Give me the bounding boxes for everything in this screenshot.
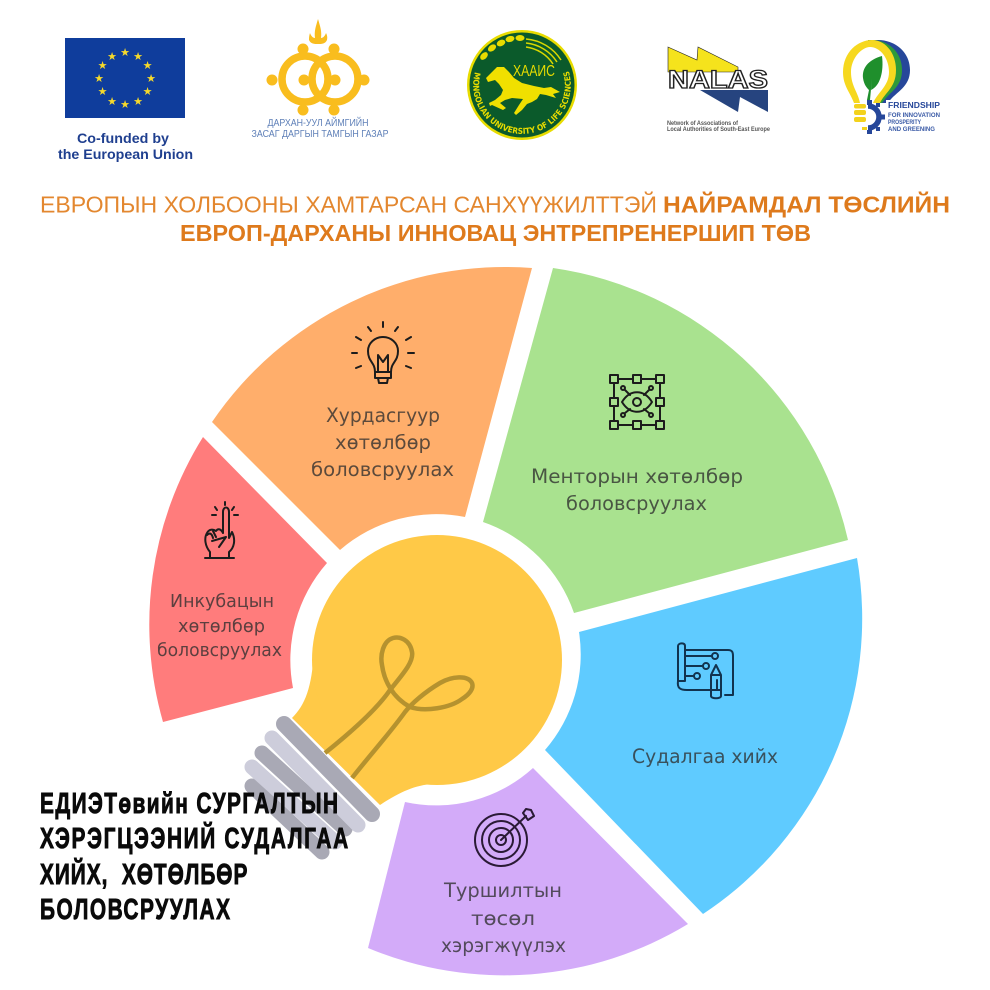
logo: NALAS: Network of Associations of [667,121,739,127]
logo: NALAS [667,47,771,133]
illustration: central light bulb [252,535,562,852]
logo: EU co-funded: ★ [133,51,143,63]
logo: Darkhan-Uul aimag [252,19,389,140]
heading: bold caption: ЕДИЭТөвийн СУРГАЛТЫН [40,788,338,820]
logo: Mongolian University of Life Sciences [467,30,577,140]
logo: EU co-funded: ★ [143,60,153,72]
text: pilot label: төсөл [471,907,535,930]
text: incubation label: боловсруулах [157,641,282,661]
title: ЕВРОПЫН ХОЛБООНЫ ХАМТАРСАН САНХҮҮЖИЛТТЭЙ [40,190,657,218]
logo: NALAS: Local Authorities of South-East Europe [667,127,771,133]
panel: incubation programme [149,437,327,722]
logo: Mongolian University of Life Sciences: MONGOLIAN UNIVERSITY OF LIFE SCIENCES [473,72,571,134]
title [40,190,950,246]
logo: EU co-funded: ★ [146,73,156,85]
text: accelerator label: боловсруулах [311,458,454,481]
title: НАЙРАМДАЛ ТӨСЛИЙН [663,190,950,218]
logo: Friendship: FRIENDSHIP [888,101,941,110]
panel: research [545,558,862,914]
heading: bold caption [40,788,348,926]
text: incubation label [157,592,282,661]
logo: NALAS: NALAS [668,66,768,94]
heading: bold caption: ХИЙХ, ХӨТӨЛБӨР [40,856,247,891]
text: mentor label [531,465,743,515]
text: accelerator label [311,404,454,481]
text: accelerator label: Хурдасгуур [326,404,440,427]
heading: bold caption: БОЛОВСРУУЛАХ [40,894,230,926]
text: incubation label: хөтөлбөр [178,617,265,637]
text: incubation label: Инкубацын [170,592,274,612]
logo: Darkhan-Uul aimag: ДАРХАН-УУЛ АЙМГИЙН [268,116,368,129]
icon: target [475,809,534,866]
logo: EU co-funded: ★ [133,96,143,108]
text: mentor label: боловсруулах [566,492,707,515]
logo: EU co-funded: ★ [94,73,104,85]
logo: EU co-funded: ★ [107,96,117,108]
logo: EU co-funded [58,38,193,162]
logo: Friendship: FOR INNOVATION [888,113,940,119]
logo: EU co-funded: ★ [120,99,130,111]
logo: EU co-funded: ★ [143,86,153,98]
logo: EU co-funded: ★ [120,47,130,59]
logo: Friendship: PROSPERITY [888,120,921,126]
panel: accelerator programme [212,267,532,550]
panel: mentor programme [483,268,848,613]
text: accelerator label: хөтөлбөр [335,431,431,454]
icon: light bulb [352,322,414,383]
heading: bold caption: ХЭРЭГЦЭЭНИЙ СУДАЛГАА [40,820,348,855]
logo: EU co-funded: Co-funded by [77,130,169,146]
logo: Friendship: AND GREENING [888,127,935,133]
logo: Mongolian University of Life Sciences: ХААИС [513,63,555,80]
text: pilot label [441,879,566,957]
logo: EU co-funded: the European Union [58,146,193,162]
logo: EU co-funded: ★ [107,51,117,63]
logo: Darkhan-Uul aimag: ЗАСАГ ДАРГЫН ТАМГЫН ГАЗАР [252,129,389,140]
text: mentor label: Менторын хөтөлбөр [531,465,743,488]
logo: EU co-funded: ★ [98,60,108,72]
text: pilot label: Туршилтын [443,879,562,902]
logo: Friendship [843,40,941,134]
logo: EU co-funded: ★ [98,86,108,98]
icon: pointing hand [205,502,238,558]
text: research label: Судалгаа хийх [632,745,778,768]
icon: eye network [610,375,664,429]
text: pilot label: хэрэгжүүлэх [441,934,566,957]
icon: blueprint [678,643,733,698]
title: ЕВРОП-ДАРХАНЫ ИННОВАЦ ЭНТРЕПРЕНЕРШИП ТӨВ [180,220,811,246]
panel: pilot project [368,768,688,975]
